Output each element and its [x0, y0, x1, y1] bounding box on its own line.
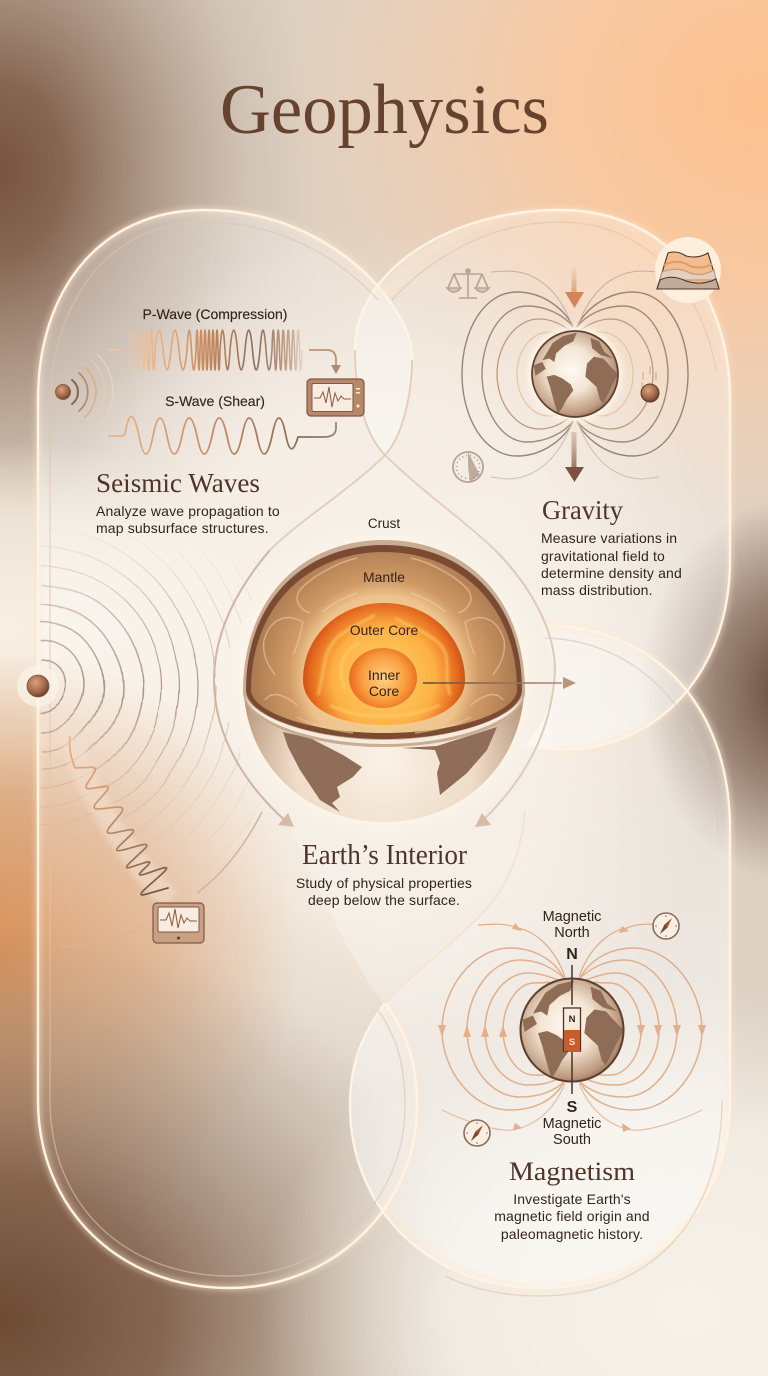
description: magnetism: paleomagnetic history. — [501, 1226, 643, 1242]
label: magnetic north: North — [554, 925, 590, 941]
panel fill: central teardrop — [214, 455, 555, 1003]
connecting line: lower right into centre — [385, 810, 525, 1003]
faint ground line — [60, 927, 142, 947]
description: interior: deep below the surface. — [308, 892, 460, 908]
label: S pole: S — [567, 1099, 578, 1116]
inner core — [349, 648, 417, 708]
panel: Earth's interior — [214, 516, 576, 908]
mantle — [251, 552, 517, 733]
centre line: left loop into ring — [214, 360, 412, 680]
arrow: gravity downward top — [565, 268, 584, 308]
icon: magnetic globe — [520, 978, 624, 1082]
description: seismic: map subsurface structures. — [96, 520, 269, 536]
icon: source ball — [17, 665, 59, 707]
labels: Core — [369, 683, 399, 699]
continent right — [402, 727, 497, 795]
panel: seismic waves — [56, 306, 364, 536]
label: N pole: N — [566, 946, 578, 963]
field arrowheads — [438, 923, 706, 1132]
seismic ripple field — [17, 540, 262, 948]
arrow: P-wave to recorder — [309, 350, 341, 374]
panel fill: left loop — [38, 210, 417, 1288]
masking halo behind zigzag — [70, 737, 170, 900]
chart: S-wave trace — [108, 416, 336, 454]
continent left — [283, 732, 362, 812]
heading: Magnetism: Magnetism — [509, 1157, 635, 1186]
labels: Mantle — [363, 569, 405, 585]
arrow: P-wave lead-in — [108, 349, 122, 351]
lip of the cut — [245, 694, 523, 744]
panel fill: lower right loop — [350, 625, 730, 1288]
axis lines — [571, 965, 573, 1094]
centre line: right loop into ring — [355, 350, 555, 670]
labels: Inner — [368, 667, 400, 683]
outer bright line: right loop — [355, 210, 730, 750]
icon: bar magnet — [564, 1008, 580, 1051]
inner shadow lines — [50, 222, 722, 1296]
connecting line: lower left into centre — [245, 830, 385, 1003]
arrow: gravity downward bottom — [565, 432, 584, 482]
title: Geophysics — [220, 71, 549, 149]
callout line — [423, 677, 576, 689]
icon: gauge — [453, 452, 483, 482]
label: magnetic south: South — [553, 1132, 591, 1148]
icon: topographic map — [655, 237, 721, 303]
icon: compass bottom — [464, 1120, 490, 1146]
description: gravity: Measure variations in — [541, 530, 677, 546]
description: gravity: mass distribution. — [541, 582, 653, 598]
panel: outline loops — [38, 210, 730, 1296]
line to tablet — [197, 812, 262, 893]
icon: tablet — [153, 903, 204, 943]
description: gravity: gravitational field to — [541, 548, 665, 564]
icon: earth globe — [532, 331, 618, 417]
halo — [527, 326, 623, 422]
icon: compass top — [653, 913, 679, 939]
mantle convection arrows — [264, 558, 504, 733]
description: magnetism: magnetic field origin and — [494, 1208, 650, 1224]
description: interior: Study of physical properties — [296, 875, 472, 891]
field lines — [442, 924, 702, 1130]
ring arrow right — [475, 550, 555, 827]
ring arrow left — [214, 550, 294, 827]
field lines — [462, 271, 688, 479]
label: P-Wave: P-Wave (Compression) — [143, 306, 287, 322]
label: magnetic north: Magnetic — [543, 909, 601, 925]
outer core — [303, 603, 465, 725]
labels — [350, 516, 418, 699]
label: S-Wave: S-Wave (Shear) — [165, 393, 265, 409]
outer bright line: left loop — [38, 210, 412, 1100]
glow halo — [238, 536, 530, 828]
outer core swirls — [318, 615, 450, 716]
labels: Outer Core — [350, 623, 418, 638]
description: magnetism: Investigate Earth's — [513, 1191, 631, 1207]
icon: seismic source — [56, 354, 113, 430]
dark crust band — [246, 545, 522, 739]
outer bright line: bottom right — [350, 625, 730, 1288]
heading: Seismic Waves: Seismic Waves — [96, 468, 260, 498]
panel fill: right top loop — [355, 210, 730, 750]
crust — [243, 540, 525, 747]
panel: gravity — [447, 237, 721, 598]
panel: magnetism — [438, 909, 706, 1242]
chart: P-wave trace — [130, 330, 302, 370]
chart: zigzag wave — [70, 737, 168, 895]
labels: Crust — [368, 516, 400, 531]
heading: Gravity: Gravity — [542, 495, 623, 525]
description: seismic: Analyze wave propagation to — [96, 503, 280, 519]
heading: Earth's Interior: Earth’s Interior — [302, 840, 468, 871]
description: gravity: determine density and — [541, 565, 682, 581]
lower sphere — [244, 695, 524, 822]
icon: falling mass — [641, 366, 659, 402]
ripple rings — [40, 540, 262, 849]
icon: bar magnet: S — [569, 1037, 575, 1048]
icon: scale — [447, 269, 489, 298]
icon: recorder — [307, 379, 364, 416]
label: magnetic south: Magnetic — [543, 1116, 601, 1132]
icon: bar magnet: N — [569, 1014, 576, 1025]
outer bright line: bottom left — [38, 1003, 417, 1288]
